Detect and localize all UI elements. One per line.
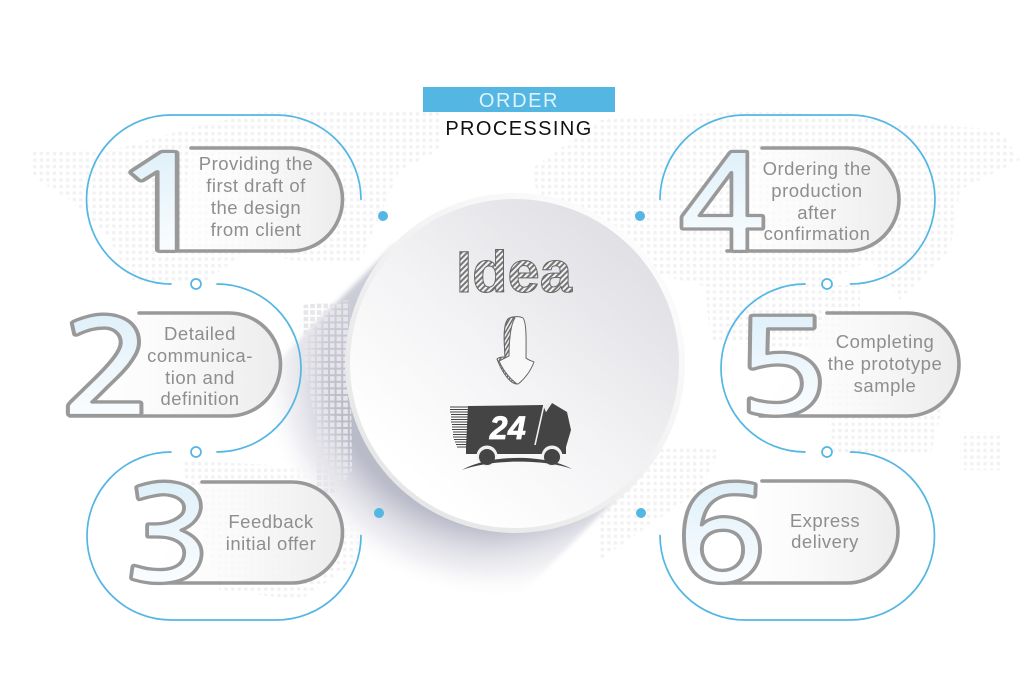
- text 1: from client: [211, 219, 301, 240]
- title: [423, 87, 615, 140]
- pill 5: [760, 313, 959, 416]
- central circle: [345, 193, 685, 533]
- text 2: communica-: [147, 345, 253, 366]
- text 1: Providing the: [199, 153, 313, 174]
- connector ring between 4 and 5: [822, 279, 832, 289]
- Idea word: Idea: [456, 240, 573, 305]
- text 4: Ordering the: [763, 158, 871, 179]
- text 2: tion and: [165, 367, 235, 388]
- pill 4: [727, 148, 899, 251]
- number 6: 6: [674, 472, 768, 602]
- panel 4: Ordering the production: [660, 115, 935, 284]
- title banner: ORDER: [423, 87, 615, 112]
- text 5: the prototype: [828, 353, 942, 374]
- connector ring between 2 and 3: [191, 447, 201, 457]
- left wheel: [476, 446, 498, 466]
- text 3: Feedback: [228, 511, 314, 532]
- connector ring between 1 and 2: [191, 279, 201, 289]
- text 4: confirmation: [764, 223, 870, 244]
- connector curve 5: [721, 284, 805, 452]
- text 1: first draft of: [206, 175, 306, 196]
- pill 1: [177, 148, 342, 251]
- connector curve 6: [660, 452, 934, 620]
- central circle cast shadow: [278, 244, 620, 579]
- text 5: Completing: [836, 331, 934, 352]
- number 24: 24: [489, 410, 526, 446]
- connector curve 1: [87, 115, 361, 284]
- pill 3: [150, 482, 342, 583]
- connector curve 2: [217, 284, 301, 452]
- ground arc: [462, 458, 572, 470]
- number 2: 2: [59, 305, 156, 435]
- text 6: delivery: [791, 531, 859, 552]
- panel 5: Completing the prototype: [721, 284, 959, 452]
- icon: hand-drawn down arrow: [497, 317, 534, 384]
- text 2: Detailed: [164, 323, 236, 344]
- number 5: 5: [733, 305, 830, 435]
- title line: PROCESSING: PROCESSING: [445, 118, 593, 140]
- title banner: ORDER: ORDER: [479, 90, 559, 112]
- number 3: 3: [122, 473, 214, 602]
- right wheel: [542, 446, 562, 466]
- text 4: production: [771, 180, 863, 201]
- icon: 24 hour delivery truck: [450, 403, 572, 470]
- panel 3: Feedback initial offer: [87, 452, 361, 620]
- text 6: Express: [790, 510, 860, 531]
- text 1: the design: [211, 197, 301, 218]
- number 1: 1: [107, 141, 219, 271]
- panel 6: Express delivery: [660, 452, 934, 620]
- text 5: sample: [854, 375, 916, 396]
- accent dots around central circle: [374, 211, 646, 518]
- connector ring between 5 and 6: [822, 447, 832, 457]
- text 4: after: [797, 202, 837, 223]
- panel 2: Detailed communication: [59, 284, 301, 452]
- text 2: definition: [160, 388, 240, 409]
- background world map of dots: [33, 112, 1020, 598]
- pill 6: [725, 481, 898, 583]
- connector curve 4: [660, 115, 935, 284]
- pill 2: [70, 313, 280, 416]
- number 4: 4: [677, 140, 768, 271]
- connector curve 3: [87, 452, 361, 620]
- text 3: initial offer: [226, 533, 316, 554]
- panel 1: Providing the first draft: [87, 115, 361, 284]
